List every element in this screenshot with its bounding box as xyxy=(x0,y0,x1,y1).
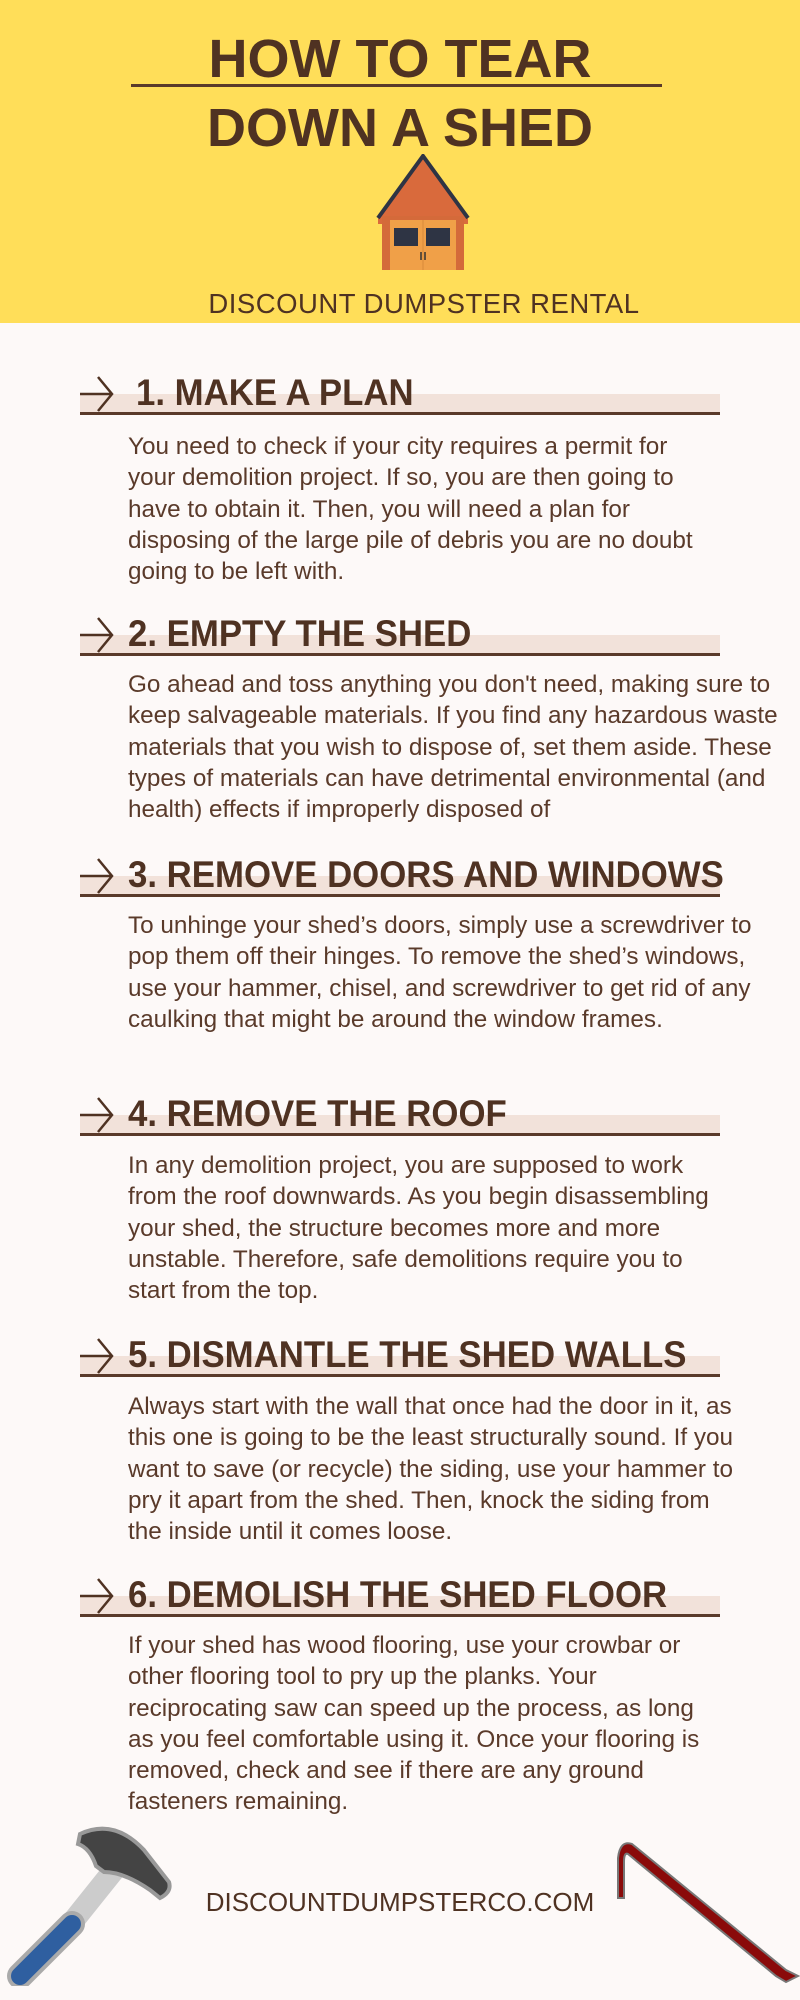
section 6 text: fasteners remaining. xyxy=(128,1788,348,1815)
section 6 text: as you feel comfortable using it. Once your flooring is xyxy=(128,1726,699,1753)
section 5 text: want to save (or recycle) the siding, use your hammer to xyxy=(128,1456,733,1483)
section 5 text: the inside until it comes loose. xyxy=(128,1518,452,1545)
section 2 text: types of materials can have detrimental environmental (and xyxy=(128,765,765,792)
subtitle: DISCOUNT DUMPSTER RENTAL xyxy=(208,288,640,319)
section 1 heading xyxy=(80,372,720,415)
section 3 text xyxy=(128,912,751,1033)
section 1 text: You need to check if your city requires a permit for xyxy=(128,433,667,460)
section 4 heading: 4. REMOVE THE ROOF xyxy=(128,1093,507,1134)
section 1 heading: 1. MAKE A PLAN xyxy=(136,372,414,413)
section 5 text: this one is going to be the least structurally sound. If you xyxy=(128,1424,733,1451)
section 4 text: unstable. Therefore, safe demolitions require you to xyxy=(128,1246,683,1273)
section 2 text: keep salvageable materials. If you find any hazardous waste xyxy=(128,702,778,729)
section 3 heading: 3. REMOVE DOORS AND WINDOWS xyxy=(128,854,724,895)
section 4 text: from the roof downwards. As you begin disassembling xyxy=(128,1183,709,1210)
section 4 heading xyxy=(80,1093,720,1136)
title line 2: DOWN A SHED xyxy=(207,98,593,158)
section 5 text xyxy=(128,1393,733,1545)
section 1 text: have to obtain it. Then, you will need a plan for xyxy=(128,496,630,523)
section 6 heading: 6. DEMOLISH THE SHED FLOOR xyxy=(128,1574,667,1615)
section 1 text: disposing of the large pile of debris you are no doubt xyxy=(128,527,693,554)
section 2 text: health) effects if improperly disposed of xyxy=(128,796,550,823)
section 2 text: materials that you wish to dispose of, set them aside. These xyxy=(128,734,772,761)
section 5 text: Always start with the wall that once had the door in it, as xyxy=(128,1393,732,1420)
icon: hammer xyxy=(7,1826,172,1986)
section 2 text xyxy=(128,671,778,823)
section 4 text xyxy=(128,1152,709,1304)
section 4 text: start from the top. xyxy=(128,1277,318,1304)
section 5 heading: 5. DISMANTLE THE SHED WALLS xyxy=(128,1334,686,1375)
section 1 text: going to be left with. xyxy=(128,558,344,585)
header panel xyxy=(0,0,800,323)
section 1 text xyxy=(128,433,693,585)
section 6 text: If your shed has wood flooring, use your crowbar or xyxy=(128,1632,680,1659)
section 2 heading: 2. EMPTY THE SHED xyxy=(128,613,471,654)
section 4 text: your shed, the structure becomes more and more xyxy=(128,1215,660,1242)
title line 1: HOW TO TEAR xyxy=(208,29,591,89)
icon: shed xyxy=(376,154,470,270)
section 1 text: your demolition project. If so, you are then going to xyxy=(128,464,674,491)
footer url: DISCOUNTDUMPSTERCO.COM xyxy=(206,1887,594,1917)
section 2 text: Go ahead and toss anything you don't need, making sure to xyxy=(128,671,770,698)
section 6 text: removed, check and see if there are any ground xyxy=(128,1757,644,1784)
section 3 text: To unhinge your shed’s doors, simply use a screwdriver to xyxy=(128,912,751,939)
section 6 text: other flooring tool to pry up the planks. Your xyxy=(128,1663,597,1690)
section 6 text xyxy=(128,1632,699,1815)
section 3 text: pop them off their hinges. To remove the shed’s windows, xyxy=(128,943,745,970)
section 5 text: pry it apart from the shed. Then, knock the siding from xyxy=(128,1487,710,1514)
icon: crowbar xyxy=(617,1842,800,1984)
section 3 text: caulking that might be around the window frames. xyxy=(128,1006,663,1033)
section 3 text: use your hammer, chisel, and screwdriver to get rid of any xyxy=(128,975,751,1002)
section 4 text: In any demolition project, you are supposed to work xyxy=(128,1152,683,1179)
section 6 text: reciprocating saw can speed up the process, as long xyxy=(128,1695,694,1722)
section 2 heading xyxy=(80,613,720,656)
